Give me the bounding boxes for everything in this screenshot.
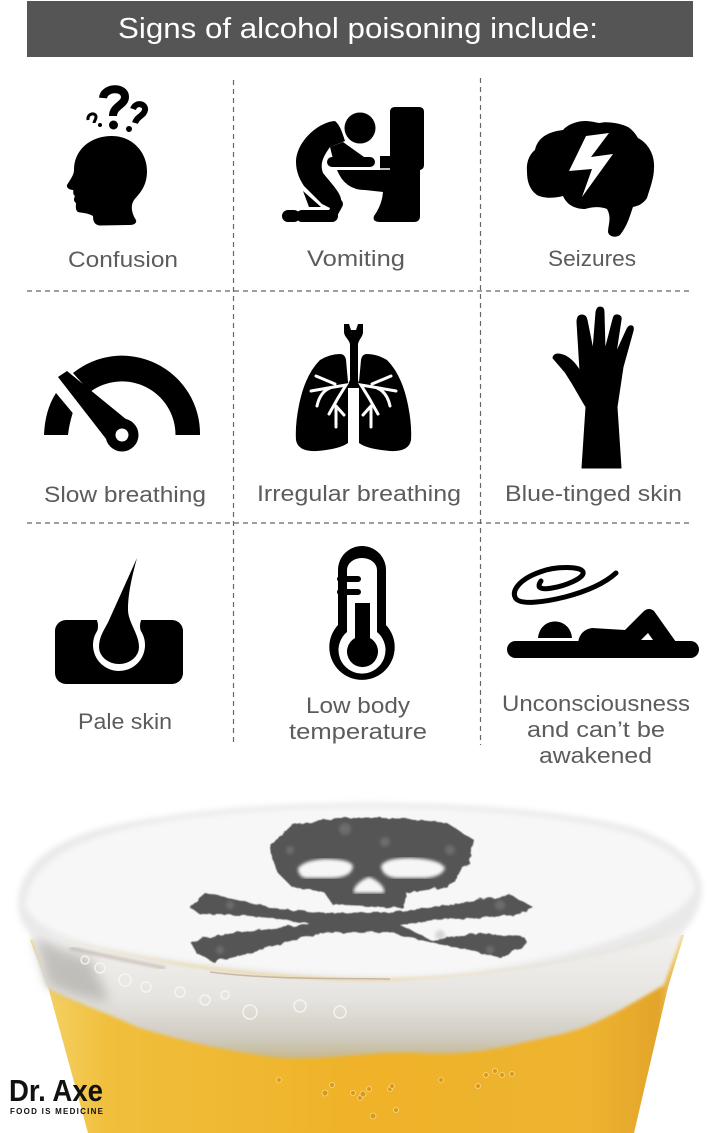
label: low body temperature: Low body [306, 693, 410, 718]
panel: confusion [67, 89, 178, 272]
header banner: Signs of alcohol poisoning include: [118, 13, 598, 45]
panel: unconsciousness [502, 568, 699, 768]
label: unconsciousness: and can’t be [527, 717, 665, 742]
icon: person at toilet [288, 107, 424, 222]
header banner [27, 1, 693, 57]
label: pale skin: Pale skin [78, 709, 172, 734]
glass rim and foam top [18, 803, 702, 980]
label: blue-tinged skin: Blue-tinged skin [505, 481, 682, 506]
logo: Dr. Axe: Dr. Axe [9, 1073, 103, 1108]
label: unconsciousness: awakened [539, 743, 652, 768]
logo: Dr. Axe: FOOD IS MEDICINE [10, 1107, 104, 1116]
panel: irregular breathing [257, 324, 461, 506]
label: vomiting: Vomiting [307, 246, 405, 271]
icon: speedometer gauge [44, 356, 200, 452]
panel: vomiting [288, 107, 424, 271]
panel: low body temperature [289, 546, 427, 744]
label: seizures: Seizures [548, 246, 636, 271]
skull and crossbones in foam [189, 818, 533, 962]
icon: thermometer [329, 546, 395, 680]
foam band [27, 925, 686, 1058]
panel: seizures [527, 121, 654, 271]
label: confusion: Confusion [68, 247, 178, 272]
label: irregular breathing: Irregular breathing [257, 481, 461, 506]
rising bubbles [276, 1068, 514, 1119]
icon: lungs [296, 324, 411, 451]
icon: person lying down with swirl [507, 568, 699, 658]
label: unconsciousness: Unconsciousness [502, 691, 690, 716]
icon: raised hand [553, 307, 633, 468]
panel: pale skin [55, 558, 183, 734]
label: slow breathing: Slow breathing [44, 482, 206, 507]
label: low body temperature: temperature [289, 719, 427, 744]
photo: beer glass with foam skull [18, 803, 702, 1133]
icon: brain with lightning bolt [527, 121, 654, 237]
beer liquid [30, 935, 684, 1133]
icon: head with question marks [67, 89, 147, 226]
panel: slow breathing [44, 356, 206, 507]
icon: skin and hair follicle [55, 558, 183, 684]
panel: blue-tinged skin [505, 307, 682, 506]
